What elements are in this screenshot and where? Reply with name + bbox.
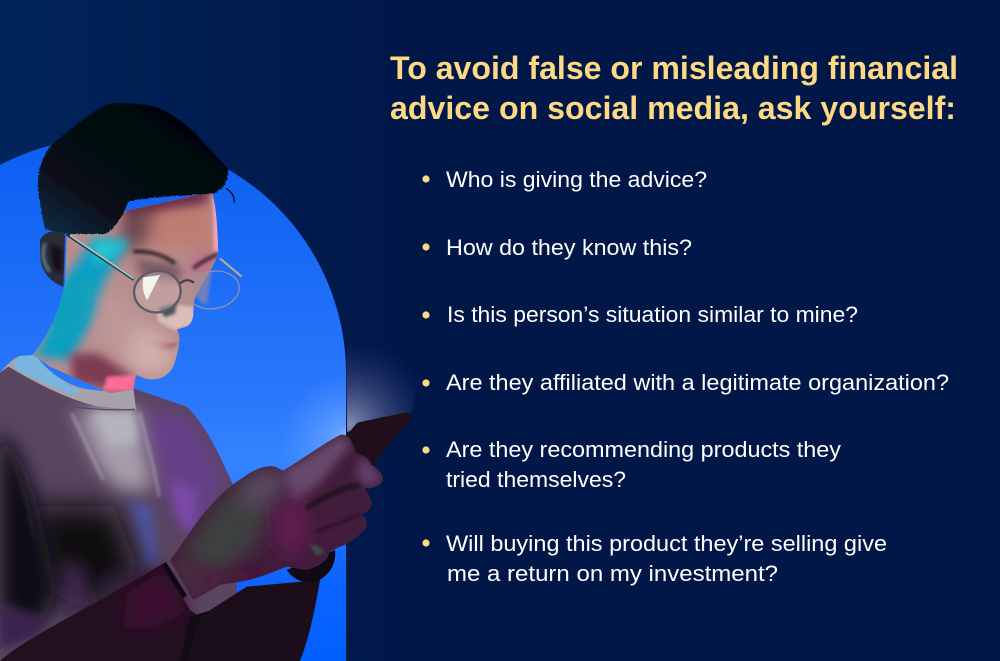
title (390, 50, 958, 126)
shirt collar (0, 355, 136, 410)
background (0, 0, 416, 432)
wristband (164, 563, 185, 597)
question 5: Are they recommending products they (446, 437, 841, 462)
shirt and torso (0, 350, 240, 661)
forearm (0, 563, 200, 661)
question list (422, 167, 949, 586)
hair (38, 103, 234, 234)
watch strap (287, 550, 335, 582)
question 4: Are they affiliated with a legitimate organization? (446, 370, 949, 395)
phone (340, 412, 411, 482)
question 2: How do they know this? (446, 235, 692, 260)
question 5: tried themselves? (446, 467, 626, 492)
question 3: Is this person’s situation similar to mine? (447, 302, 858, 327)
question 5 (422, 437, 841, 492)
panel: blue arch (0, 138, 346, 661)
question 6: me a return on my investment? (447, 561, 778, 586)
neck and face (30, 180, 242, 400)
question 1: Who is giving the advice? (446, 167, 707, 192)
question 6: Will buying this product they’re selling give (446, 531, 887, 556)
title: advice on social media, ask yourself: (390, 90, 956, 126)
question 6 (422, 531, 887, 586)
hand (160, 412, 411, 603)
illustration: man looking at phone (0, 103, 411, 661)
title: To avoid false or misleading financial (390, 50, 958, 86)
lower torso right (187, 580, 320, 661)
ear (40, 231, 65, 287)
glasses (67, 234, 242, 315)
